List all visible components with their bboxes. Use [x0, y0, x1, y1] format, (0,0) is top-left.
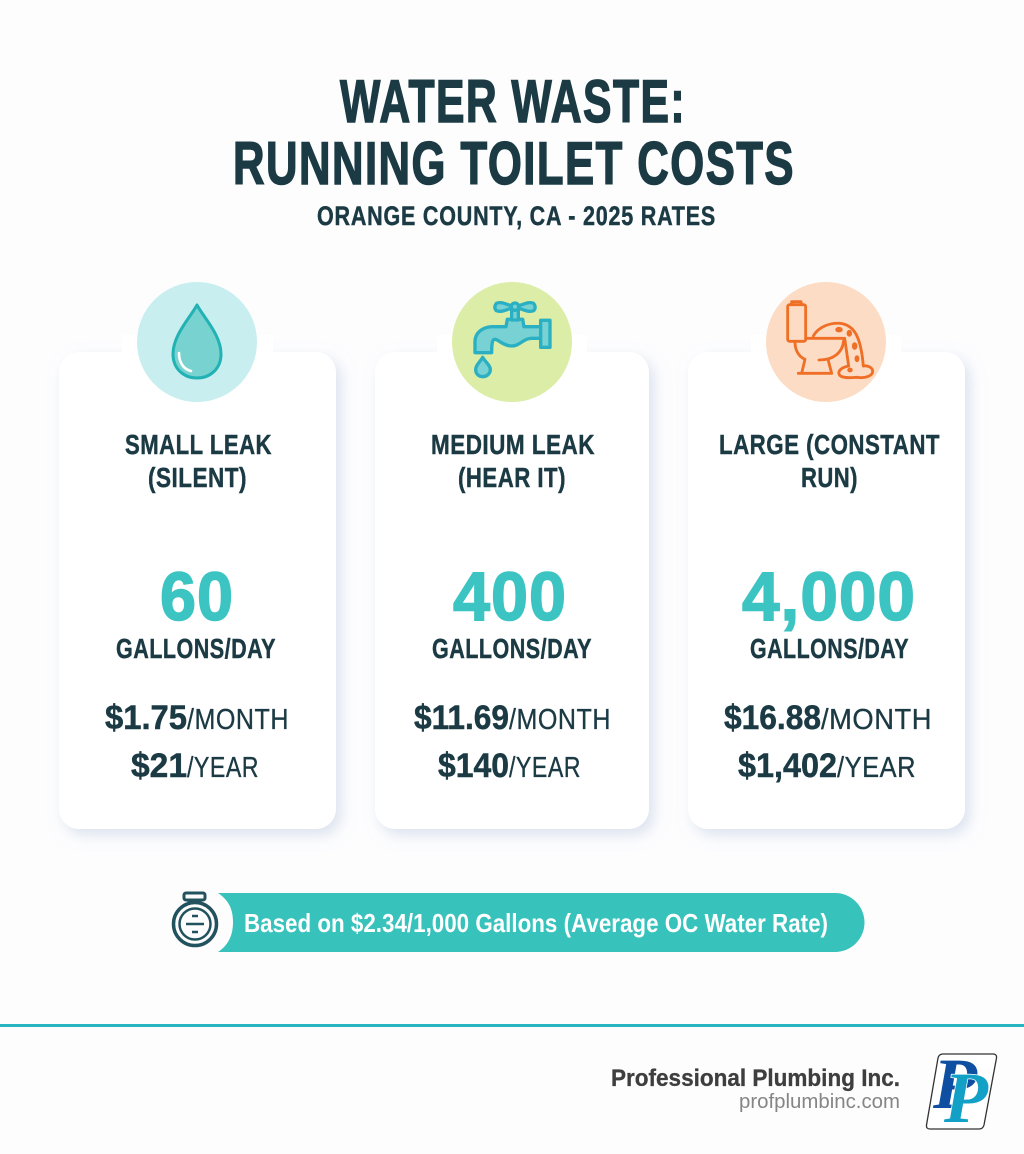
heading: large leak: RUN): [801, 462, 858, 493]
title: RUNNING TOILET COSTS: [233, 130, 795, 197]
heading: medium leak: [431, 429, 595, 493]
subtitle: ORANGE COUNTY, CA - 2025 RATES: [317, 201, 716, 231]
stat: 400 gallons per day: 400: [453, 558, 567, 635]
cost: small leak: /YEAR: [187, 752, 259, 784]
cost: large leak: $16.88: [724, 699, 821, 737]
heading: large leak: LARGE (CONSTANT: [719, 429, 940, 460]
icon: overflowing toilet: [766, 282, 886, 402]
cost: medium leak: $11.69: [414, 699, 509, 737]
stat: 400 gallons per day: GALLONS/DAY: [432, 633, 592, 664]
logo: PP: P: [932, 1044, 978, 1124]
cost: medium leak: /MONTH: [509, 704, 611, 736]
title: WATER WASTE:: [340, 68, 686, 135]
cost: small leak: $21: [131, 747, 187, 785]
icon: dripping faucet: [452, 282, 572, 402]
cost: large leak: $1,402: [738, 747, 837, 785]
footer: company name: [611, 1065, 900, 1113]
heading: large leak: [719, 429, 940, 493]
cost: medium leak: $140: [438, 747, 509, 785]
stat: 4,000 gallons per day: GALLONS/DAY: [750, 633, 909, 664]
panel: medium leak: [375, 282, 649, 829]
icon: stopwatch: [174, 893, 216, 946]
cost: large leak: /YEAR: [837, 752, 916, 784]
stat: 60 gallons per day: GALLONS/DAY: [116, 633, 276, 664]
logo: PP: P: [943, 1058, 989, 1138]
callout: water rate banner: [218, 893, 864, 952]
heading: medium leak: (HEAR IT): [458, 462, 566, 493]
panel: small leak: [59, 282, 336, 829]
heading: medium leak: MEDIUM LEAK: [431, 429, 595, 460]
cost: medium leak: /YEAR: [509, 752, 581, 784]
cost: medium leak: [414, 699, 611, 785]
cost: small leak: [105, 699, 289, 785]
logo: PP: [926, 1044, 997, 1138]
title: [233, 68, 795, 197]
cost: small leak: $1.75: [105, 699, 187, 737]
callout: water rate banner: Based on $2.34/1,000 Gallons (Average OC Water Rate): [244, 908, 828, 938]
heading: small leak: SMALL LEAK: [125, 429, 272, 460]
footer: company name: profplumbinc.com: [739, 1091, 900, 1113]
stat: 60 gallons per day: [116, 558, 276, 664]
stat: 60 gallons per day: 60: [160, 558, 234, 635]
cost: large leak: [724, 699, 932, 785]
cost: small leak: /MONTH: [187, 704, 289, 736]
heading: small leak: [125, 429, 272, 493]
stat: 4,000 gallons per day: 4,000: [742, 558, 916, 635]
heading: small leak: (SILENT): [148, 462, 247, 493]
cost: large leak: /MONTH: [821, 704, 932, 736]
stat: 400 gallons per day: [432, 558, 592, 664]
icon: water drop: [137, 282, 257, 402]
footer: company name: Professional Plumbing Inc.: [611, 1065, 900, 1092]
footer divider: [0, 1024, 1024, 1027]
panel: large leak: [688, 282, 965, 829]
